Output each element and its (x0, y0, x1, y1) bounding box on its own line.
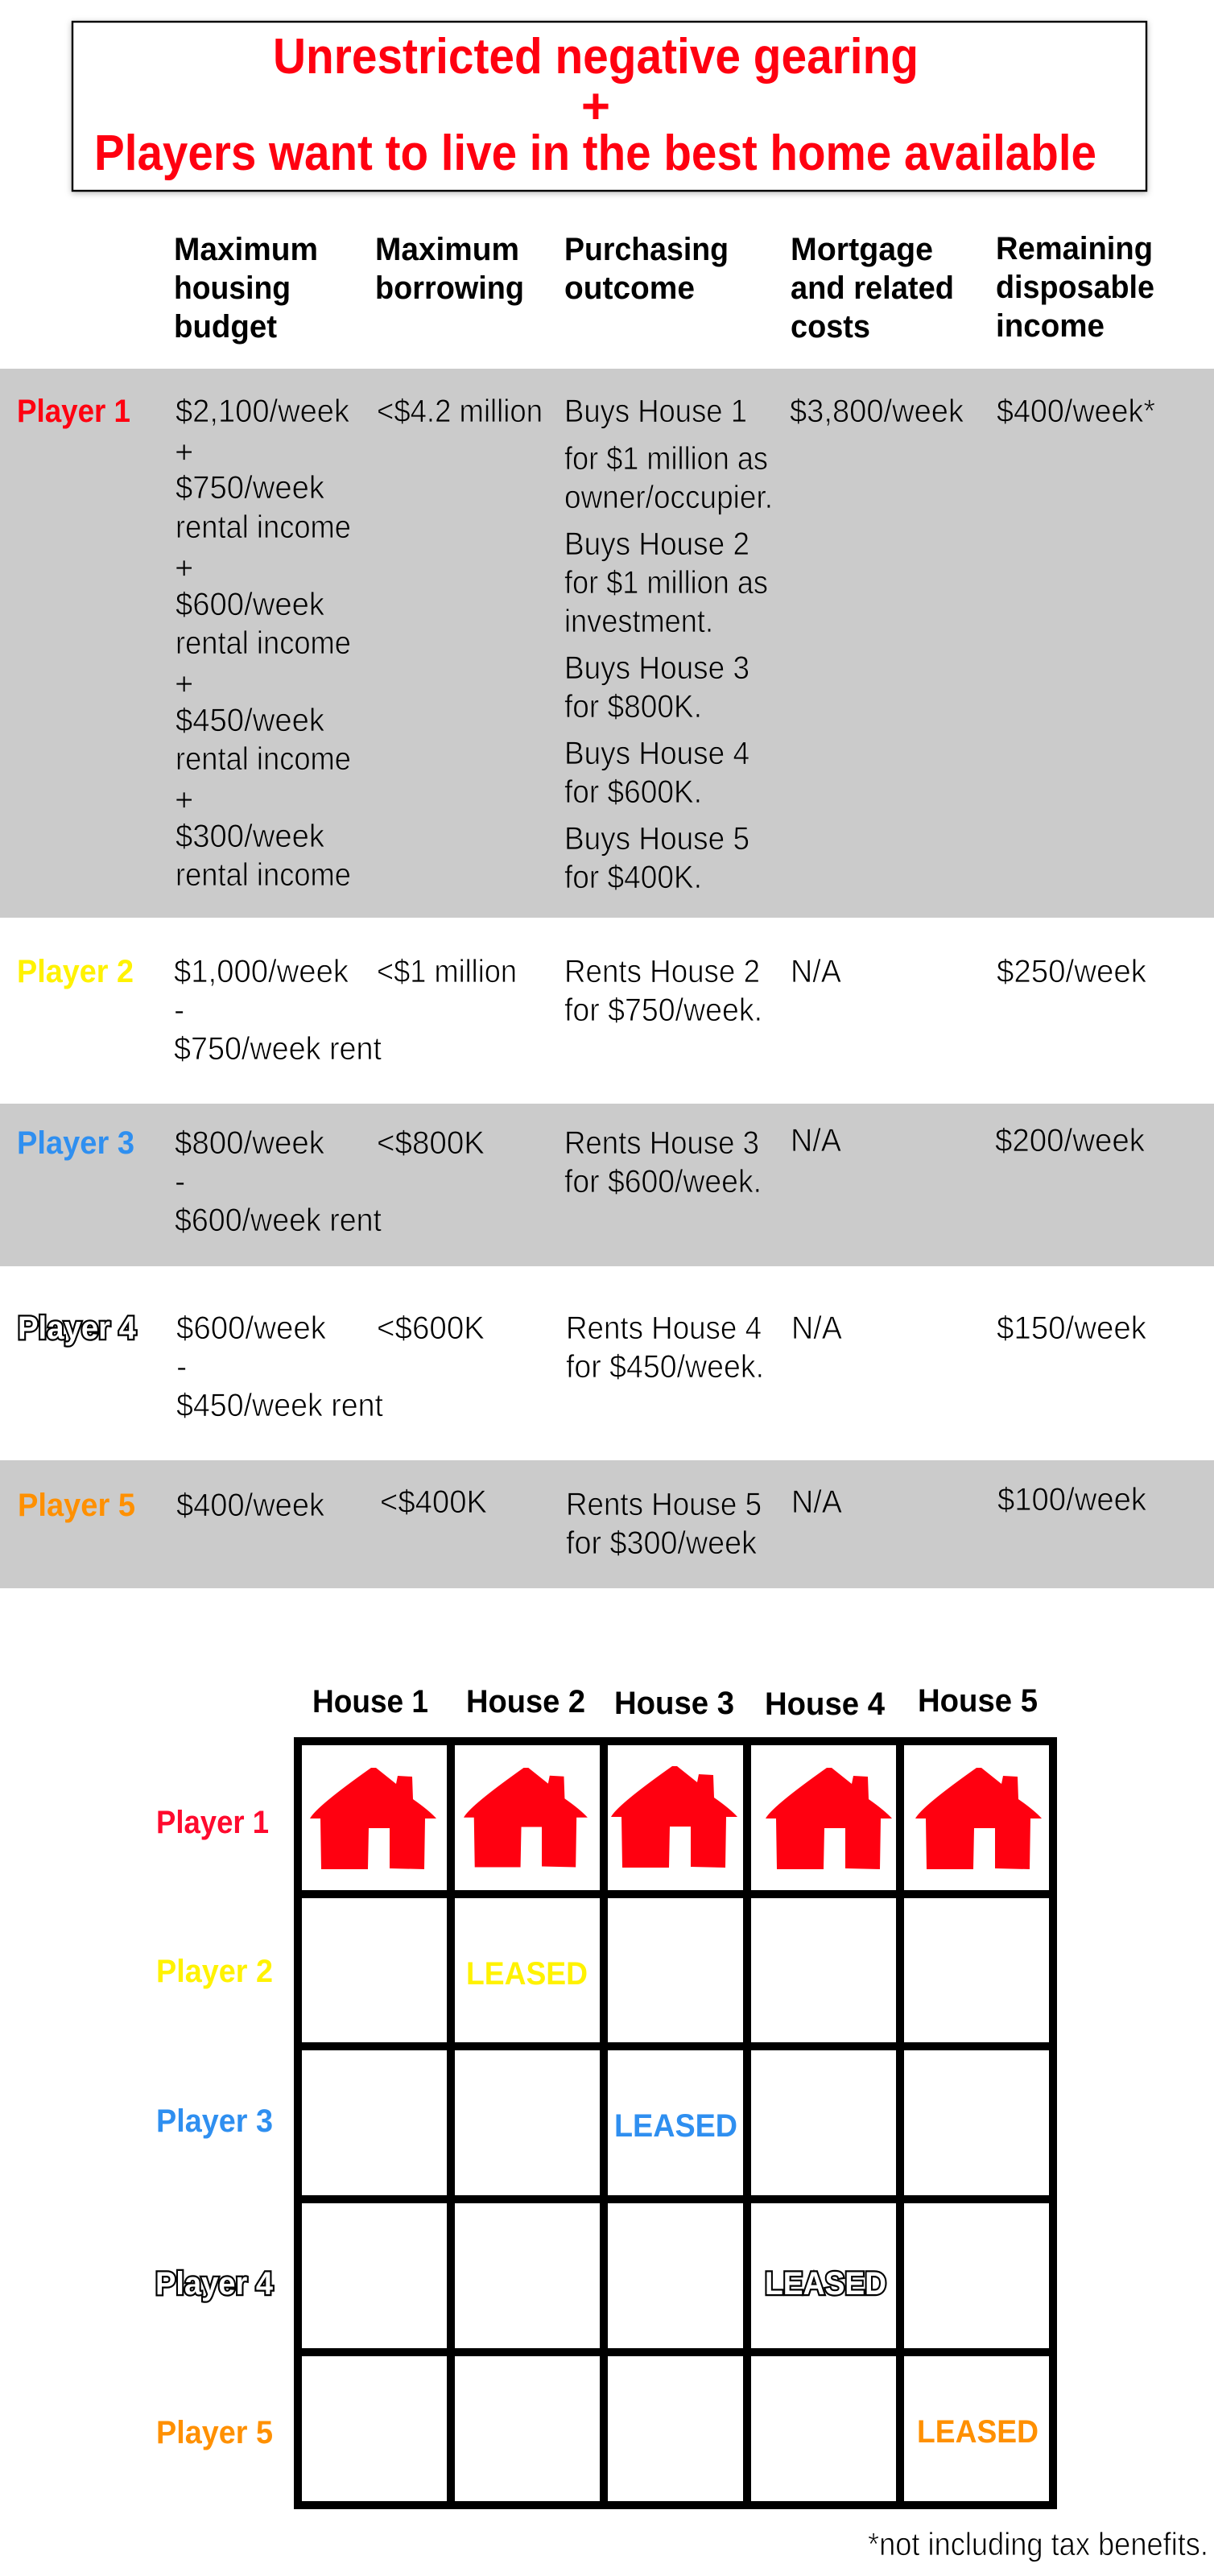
heading: remaining disposable income: income (996, 308, 1105, 344)
title line 1: Unrestricted negative gearing (273, 29, 919, 85)
player 1 purchasing outcome: Buys House 5 (564, 821, 749, 857)
player 1 purchasing outcome: Buys House 3 (564, 650, 749, 686)
heading: mortgage and related costs (791, 232, 954, 345)
player 5 disposable income: $100/week (997, 1482, 1147, 1517)
player 5 renting outcome: Rents House 5 (566, 1487, 762, 1522)
player 3 housing budget: - (175, 1164, 185, 1199)
title plus: + (581, 79, 610, 134)
player 4 renting outcome: for $450/week. (566, 1349, 764, 1385)
player 4 mortgage costs: N/A (791, 1311, 842, 1346)
player 1 housing budget: + (175, 782, 193, 818)
player 1 housing budget: rental income (175, 741, 351, 777)
player 5 renting outcome (566, 1487, 762, 1561)
panel: player 5 row (0, 1460, 1214, 1588)
player 1 purchasing outcome: for $600K. (564, 774, 702, 810)
player 1 disposable income: $400/week* (997, 394, 1155, 429)
table column headings (174, 231, 1154, 345)
player 1 housing budget: + (175, 435, 193, 470)
player 3 maximum borrowing: <$800K (377, 1125, 485, 1161)
leased label player 4: LEASED (765, 2266, 886, 2301)
player 3 mortgage costs: N/A (791, 1123, 841, 1158)
player 1 purchasing outcome: Buys House 1 (564, 394, 747, 429)
player 3 housing budget: $600/week rent (175, 1203, 382, 1238)
player row labels: Player 1 (156, 1805, 269, 1840)
panel: player 3 row (0, 1104, 1214, 1266)
panel: title box (72, 22, 1146, 191)
player 5 housing budget: $400/week (176, 1488, 325, 1523)
player 1 housing budget: + (175, 667, 193, 702)
heading: mortgage and related costs: Mortgage (791, 232, 933, 267)
player row labels: Player 4 (155, 2266, 274, 2301)
player 3 renting outcome: for $600/week. (564, 1164, 762, 1199)
player row labels: Player 3 (156, 2103, 273, 2139)
player 2 housing budget: $750/week rent (174, 1031, 382, 1067)
player 1 housing budget: rental income (175, 510, 351, 545)
icon: house 4 owned (766, 1768, 892, 1869)
heading: purchasing outcome: Purchasing (564, 232, 729, 267)
player row labels: Player 2 (156, 1954, 273, 1989)
player 3 housing budget (175, 1125, 382, 1238)
player 1 housing budget: rental income (175, 625, 351, 661)
icon: house 2 owned (464, 1768, 588, 1867)
player 1 purchasing outcome: for $400K. (564, 860, 702, 895)
player 1 housing budget: $300/week (175, 819, 325, 854)
heading: remaining disposable income (996, 231, 1154, 344)
player 1 purchasing outcome (564, 394, 773, 895)
player 4 maximum borrowing: <$600K (377, 1311, 485, 1346)
player 2 renting outcome: for $750/week. (564, 993, 762, 1028)
house column headings (312, 1683, 1038, 1722)
panel: player 1 row (0, 369, 1214, 918)
player 4 housing budget (176, 1311, 383, 1423)
player 1 housing budget: $600/week (175, 587, 325, 622)
player 1 purchasing outcome: Buys House 4 (564, 736, 749, 771)
heading: maximum housing budget: housing (174, 270, 291, 306)
player 5 label: Player 5 (18, 1488, 135, 1523)
heading: remaining disposable income: disposable (996, 270, 1154, 305)
house column headings: House 2 (466, 1684, 585, 1719)
player 1 housing budget (175, 394, 351, 893)
ownership grid (294, 1737, 1057, 2509)
player 1 purchasing outcome: for $1 million as (564, 565, 768, 601)
player 2 renting outcome (564, 954, 762, 1028)
player 4 housing budget: $450/week rent (176, 1388, 383, 1423)
panel: player 4 row (18, 1311, 1147, 1423)
heading: mortgage and related costs: and related (791, 270, 954, 306)
player row labels: Player 5 (156, 2415, 273, 2450)
player 2 housing budget: $1,000/week (174, 954, 349, 989)
player 4 renting outcome: Rents House 4 (566, 1311, 762, 1346)
player 1 housing budget: rental income (175, 857, 351, 893)
house column headings: House 3 (614, 1686, 734, 1721)
heading: purchasing outcome: outcome (564, 270, 695, 306)
player 1 housing budget: + (175, 551, 193, 586)
panel: player 2 row (17, 954, 1147, 1067)
house column headings: House 5 (918, 1683, 1038, 1719)
heading: maximum housing budget (174, 232, 318, 345)
player 3 disposable income: $200/week (995, 1123, 1146, 1158)
heading: maximum housing budget: budget (174, 309, 277, 345)
player 1 housing budget: $750/week (175, 470, 325, 506)
leased label player 2: LEASED (466, 1956, 588, 1992)
player 4 renting outcome (566, 1311, 764, 1385)
player 2 mortgage costs: N/A (791, 954, 841, 989)
player 1 label: Player 1 (17, 394, 130, 429)
player 1 housing budget: $450/week (175, 703, 325, 738)
player 2 renting outcome: Rents House 2 (564, 954, 760, 989)
heading: maximum housing budget: Maximum (174, 232, 318, 267)
heading: remaining disposable income: Remaining (996, 231, 1153, 266)
house column headings: House 4 (765, 1686, 886, 1722)
player 4 housing budget: - (176, 1349, 187, 1385)
icon: house 1 owned (310, 1768, 436, 1869)
player 4 label: Player 4 (18, 1311, 137, 1346)
house column headings: House 1 (312, 1684, 428, 1719)
icon: house 5 owned (915, 1768, 1042, 1869)
player 3 housing budget: $800/week (175, 1125, 325, 1161)
title line 2: Players want to live in the best home available (94, 126, 1096, 181)
icon: house 3 owned (611, 1766, 737, 1868)
player 1 mortgage costs: $3,800/week (790, 394, 964, 429)
player 2 housing budget: - (174, 993, 184, 1028)
heading: maximum borrowing: Maximum (375, 232, 519, 267)
player 1 maximum borrowing: <$4.2 million (377, 394, 543, 429)
player row labels (155, 1805, 274, 2450)
player 1 purchasing outcome: Buys House 2 (564, 526, 749, 562)
player 2 maximum borrowing: <$1 million (377, 954, 517, 989)
leased label player 3: LEASED (614, 2108, 737, 2144)
player 1 purchasing outcome: owner/occupier. (564, 480, 773, 515)
player 1 purchasing outcome: for $1 million as (564, 441, 768, 477)
player 2 label: Player 2 (17, 954, 134, 989)
player 1 purchasing outcome: investment. (564, 604, 713, 639)
player 5 mortgage costs: N/A (791, 1484, 842, 1520)
player 3 renting outcome: Rents House 3 (564, 1125, 759, 1161)
heading: maximum borrowing (375, 232, 524, 306)
player 4 disposable income: $150/week (997, 1311, 1147, 1346)
player 3 label: Player 3 (17, 1125, 134, 1161)
player 2 disposable income: $250/week (997, 954, 1147, 989)
heading: mortgage and related costs: costs (791, 309, 870, 345)
player 3 renting outcome (564, 1125, 762, 1199)
player 5 maximum borrowing: <$400K (380, 1484, 487, 1520)
player 1 purchasing outcome: for $800K. (564, 689, 702, 724)
player 4 housing budget: $600/week (176, 1311, 327, 1346)
heading: purchasing outcome (564, 232, 729, 306)
player 5 renting outcome: for $300/week (566, 1525, 758, 1561)
player 1 housing budget: $2,100/week (175, 394, 350, 429)
player 2 housing budget (174, 954, 382, 1067)
leased label player 5: LEASED (917, 2414, 1039, 2450)
heading: maximum borrowing: borrowing (375, 270, 524, 306)
